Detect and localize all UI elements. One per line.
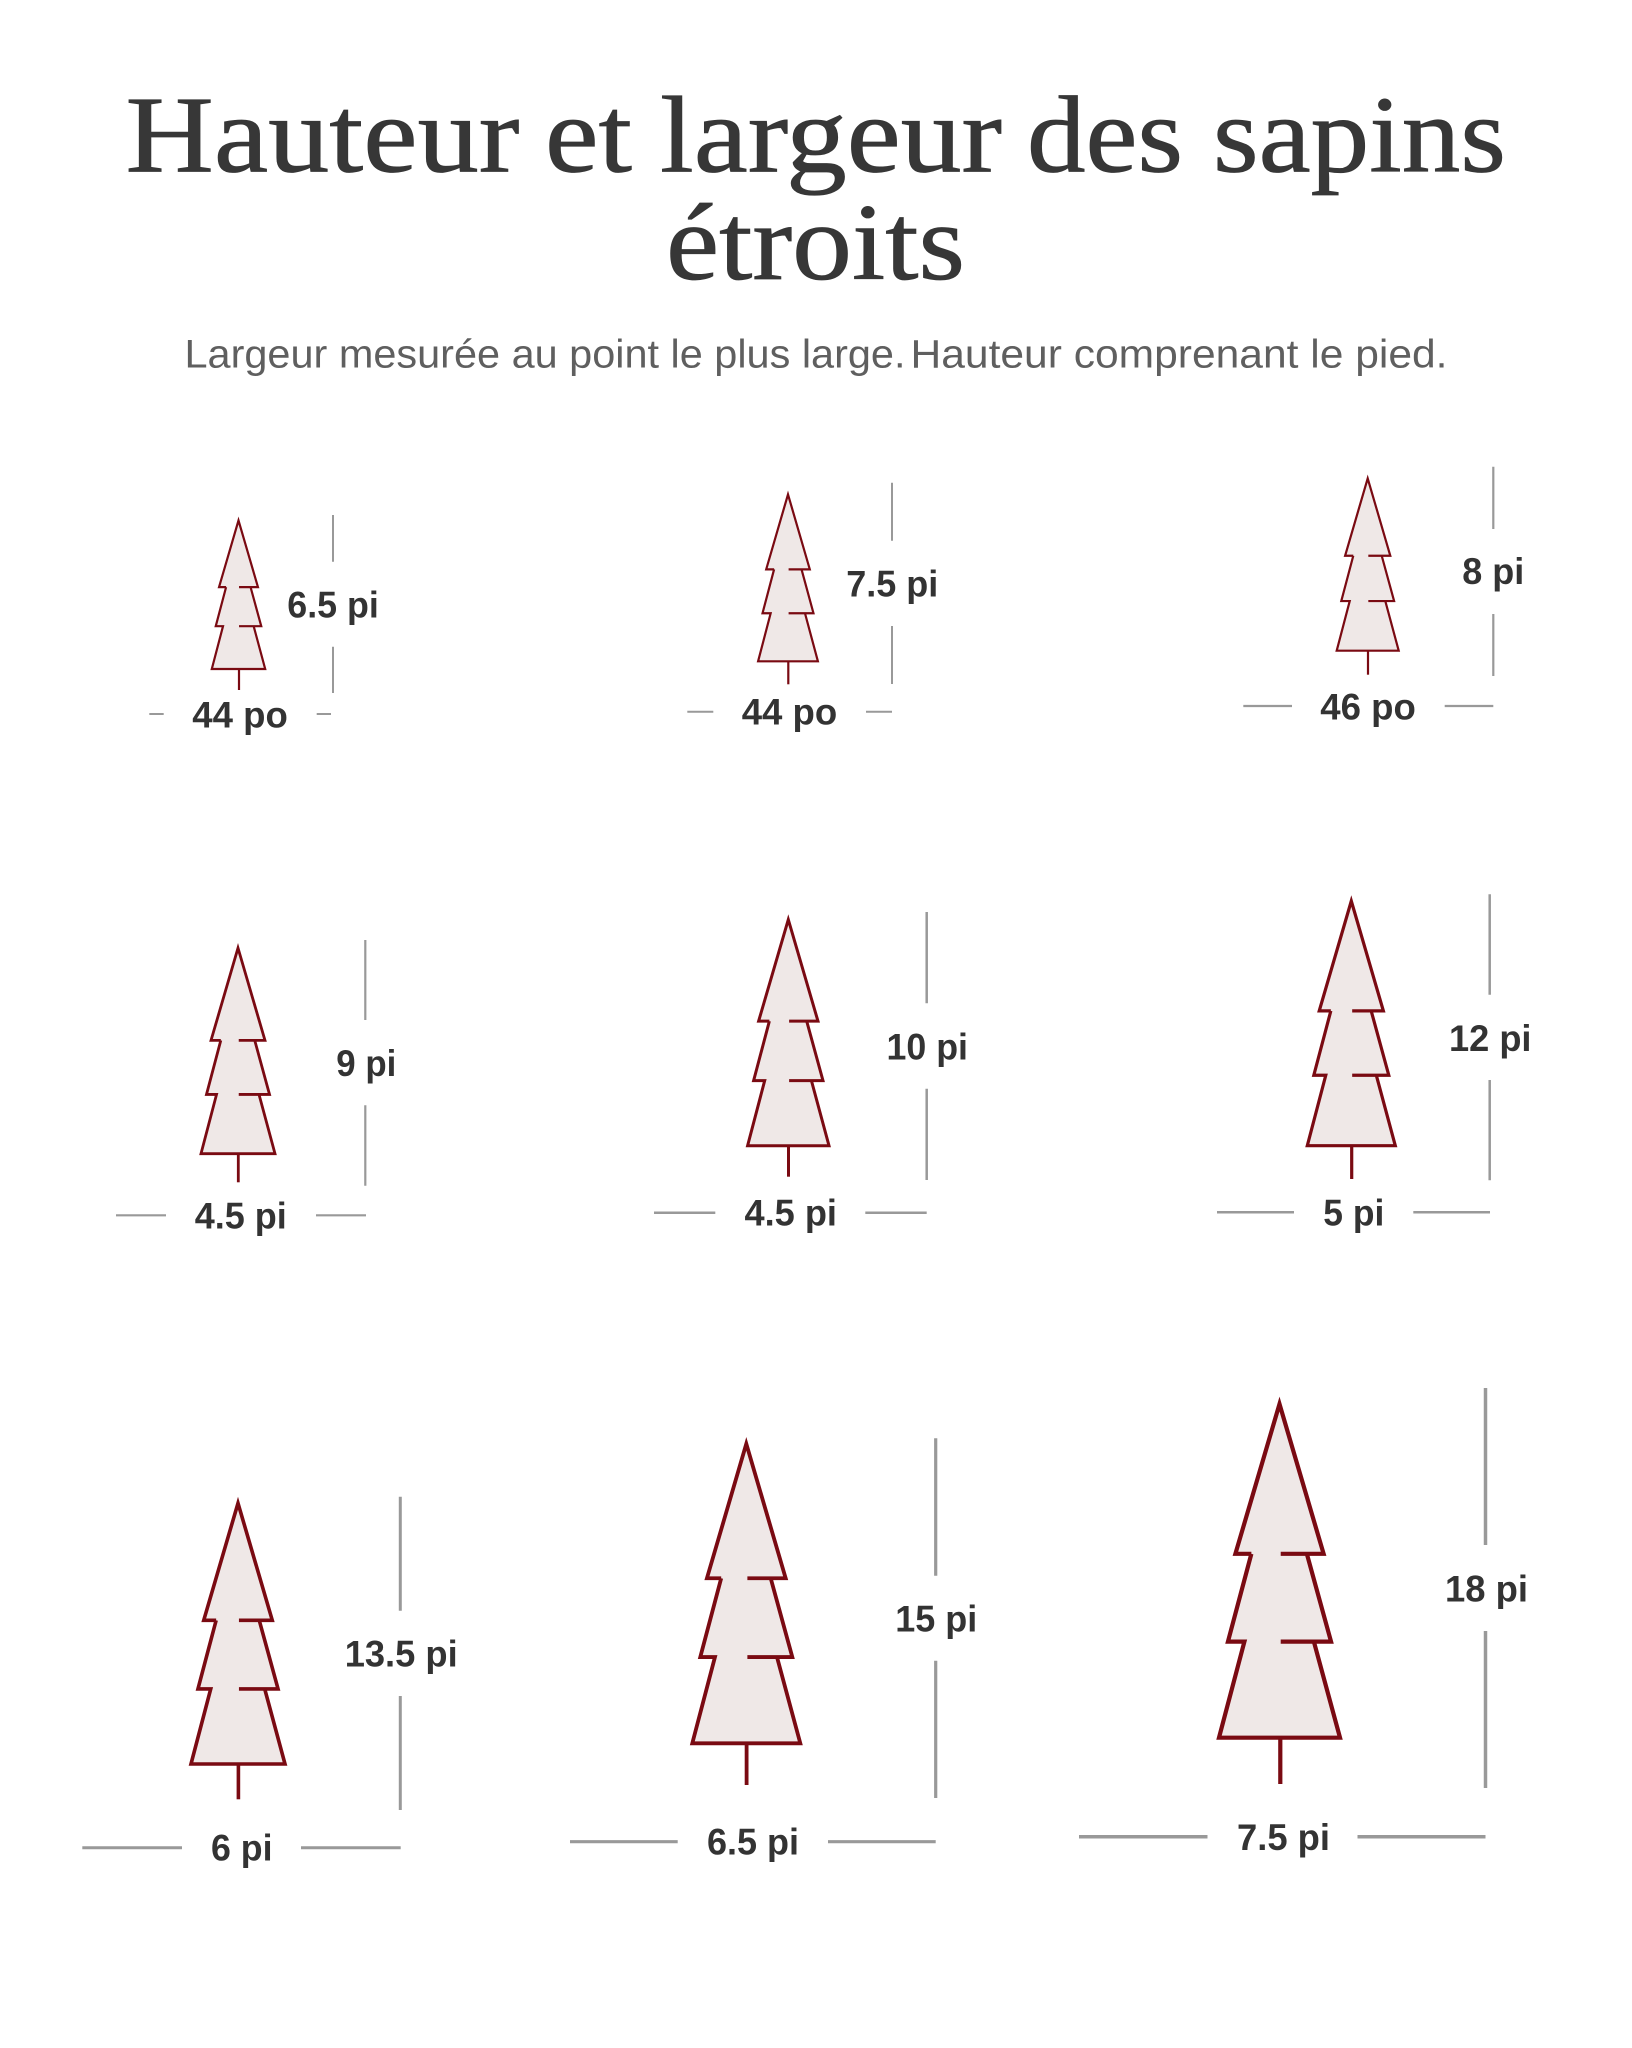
subtitle: Hauteur comprenant le pied. <box>910 333 1448 377</box>
height measure: 12 pi <box>1449 1018 1532 1059</box>
title: sapins <box>1213 75 1506 196</box>
width measure: 6.5 pi <box>707 1821 799 1862</box>
panel: tree 12 pi by 5 pi <box>1217 894 1532 1234</box>
height measure: 8 pi <box>1462 551 1524 592</box>
width measure: 44 po <box>742 691 837 732</box>
icon: tree <box>758 494 818 684</box>
panel: tree 8 pi by 46 po <box>1243 467 1524 727</box>
height measure: 15 pi <box>895 1599 977 1640</box>
width measure: 7.5 pi <box>1237 1817 1330 1858</box>
title: Hauteur <box>126 75 520 196</box>
panel: tree 15 pi by 6.5 pi <box>570 1438 977 1862</box>
width measure: 5 pi <box>1323 1193 1384 1234</box>
width measure: 46 po <box>1320 686 1416 727</box>
panel: tree 7.5 pi by 44 po <box>687 483 938 732</box>
panel: tree 10 pi by 4.5 pi <box>654 912 968 1234</box>
panel: tree 18 pi by 7.5 pi <box>1079 1388 1528 1858</box>
panel: tree 13.5 pi by 6 pi <box>82 1497 458 1869</box>
title: largeur <box>660 75 1002 196</box>
width measure: 44 po <box>192 694 288 735</box>
height measure: 10 pi <box>886 1026 968 1067</box>
icon: tree <box>1337 478 1399 675</box>
icon: tree <box>191 1503 285 1799</box>
height measure: 6.5 pi <box>287 585 379 626</box>
subtitle: Largeur mesurée au point le plus large. <box>184 333 906 377</box>
icon: tree <box>748 920 829 1177</box>
subtitle <box>184 333 1448 377</box>
icon: tree <box>692 1444 800 1785</box>
title: étroits <box>666 182 965 303</box>
panel: tree 9 pi by 4.5 pi <box>116 940 396 1236</box>
icon: tree <box>1307 901 1395 1179</box>
icon: tree <box>212 520 265 690</box>
panel: tree 6.5 pi by 44 po <box>149 515 379 735</box>
width measure: 6 pi <box>211 1828 272 1869</box>
width measure: 4.5 pi <box>195 1195 287 1236</box>
height measure: 7.5 pi <box>846 564 938 605</box>
title <box>126 75 1506 303</box>
title: et <box>545 75 632 196</box>
height measure: 9 pi <box>336 1043 396 1084</box>
width measure: 4.5 pi <box>744 1193 837 1234</box>
height measure: 13.5 pi <box>345 1634 458 1675</box>
icon: tree <box>1219 1404 1340 1784</box>
height measure: 18 pi <box>1445 1569 1528 1610</box>
title: des <box>1027 75 1183 196</box>
icon: tree <box>201 948 275 1182</box>
